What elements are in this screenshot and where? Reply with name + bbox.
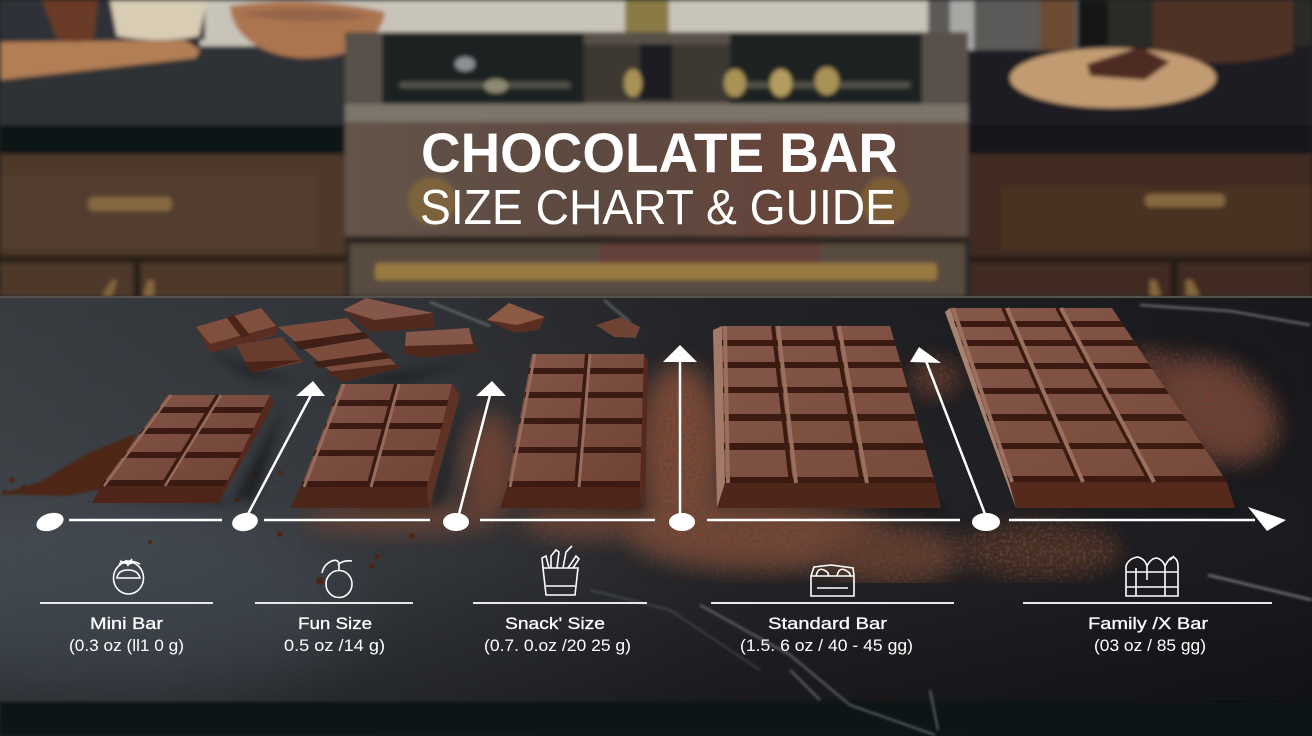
icon: fun size (322, 560, 352, 598)
title: CHOCOLATE BAR (421, 121, 898, 184)
label: standard bar (711, 565, 954, 655)
label: fun size: Fun Size (298, 614, 372, 633)
arrow: fun to snack (459, 381, 506, 514)
timeline with size-up arrows (34, 345, 1286, 534)
piece: long (278, 318, 400, 382)
label: family bar (1023, 556, 1272, 655)
arrow: snack to standard (663, 345, 697, 516)
broken chocolate pieces (196, 298, 640, 385)
piece: top (343, 298, 433, 332)
arrow: mini to fun (248, 381, 325, 514)
label: snack size: Snack' Size (505, 614, 605, 633)
label: snack size (473, 546, 647, 655)
icon: snack size (542, 546, 579, 595)
title: SIZE CHART & GUIDE (420, 181, 896, 235)
label: snack size: (0.7. 0.oz /20 25 g) (484, 636, 631, 655)
icon: family bar (1126, 556, 1178, 596)
label: mini bar: (0.3 oz (ll1 0 g) (69, 636, 184, 655)
label: mini bar (40, 559, 213, 655)
label: family bar: Family /X Bar (1088, 614, 1208, 633)
label: family bar: (03 oz / 85 gg) (1094, 636, 1206, 655)
arrow: end of timeline (1248, 507, 1286, 531)
marble countertop (0, 296, 1312, 736)
piece: small square (487, 303, 545, 333)
label: standard bar: (1.5. 6 oz / 40 - 45 gg) (740, 636, 913, 655)
label: mini bar: Mini Bar (90, 614, 163, 633)
label: standard bar: Standard Bar (768, 614, 887, 633)
icon: standard bar (811, 565, 854, 596)
bar 2: fun size (290, 384, 465, 510)
kitchen background (0, 0, 1312, 300)
bar 3: snack size (500, 354, 655, 512)
cocoa powder spread (0, 337, 1295, 585)
title (420, 121, 898, 235)
piece: right (404, 328, 479, 358)
icon: mini bar (114, 559, 144, 594)
label: fun size (255, 560, 413, 655)
bar 5: family (945, 308, 1240, 513)
label: fun size: 0.5 oz /14 g) (284, 636, 385, 655)
bar 1: mini (92, 395, 285, 505)
piece: pile left (196, 308, 303, 373)
bar 4: standard (713, 326, 945, 512)
arrow: standard to family (910, 347, 985, 514)
piece: small crumb (596, 317, 640, 338)
